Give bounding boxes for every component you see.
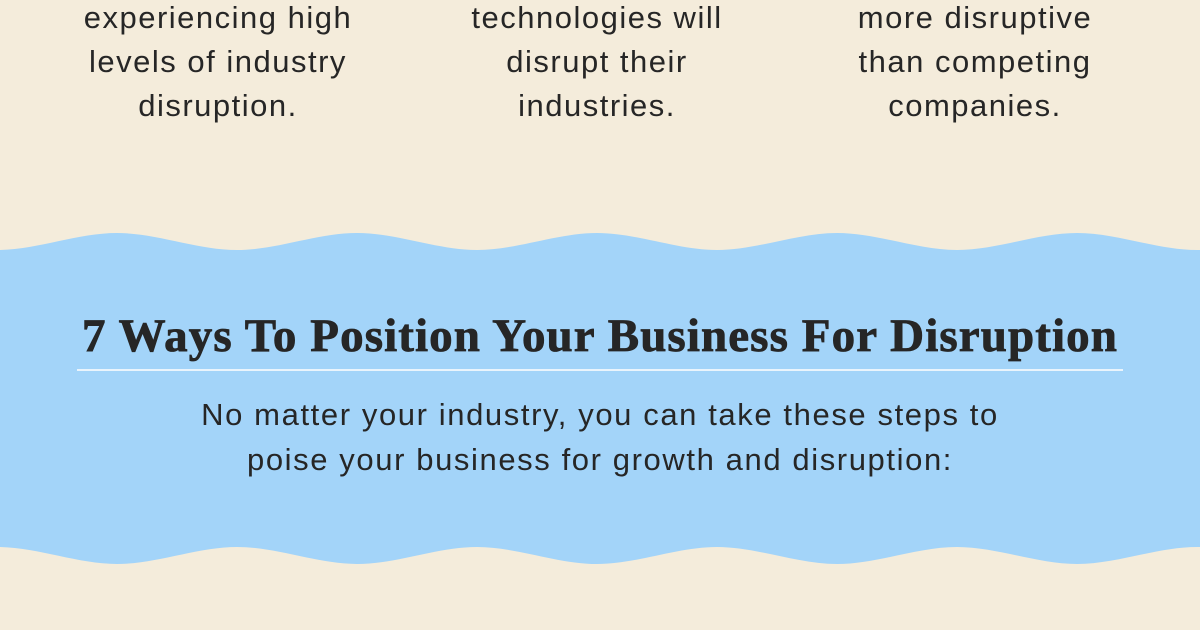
subtitle: poise your business for growth and disruption: [247, 442, 953, 477]
stat text: column 3: than competing [858, 44, 1091, 79]
stat text: column 1 [84, 0, 352, 123]
stat text: column 2: disrupt their [506, 44, 688, 79]
stat text: column 2: industries. [518, 88, 676, 123]
stat text: column 2: technologies will [471, 0, 723, 35]
stat text: column 2 [471, 0, 723, 123]
stat text: column 3: more disruptive [858, 0, 1092, 35]
subtitle [201, 397, 999, 477]
stat text: column 3 [858, 0, 1092, 123]
stat text: column 1: levels of industry [89, 44, 347, 79]
stat text: column 1: experiencing high [84, 0, 352, 35]
subtitle: No matter your industry, you can take these steps to [201, 397, 999, 432]
stat text: column 1: disruption. [138, 88, 298, 123]
stat text: column 3: companies. [888, 88, 1062, 123]
title: 7 Ways To Position Your Business For Disruption [82, 310, 1118, 362]
